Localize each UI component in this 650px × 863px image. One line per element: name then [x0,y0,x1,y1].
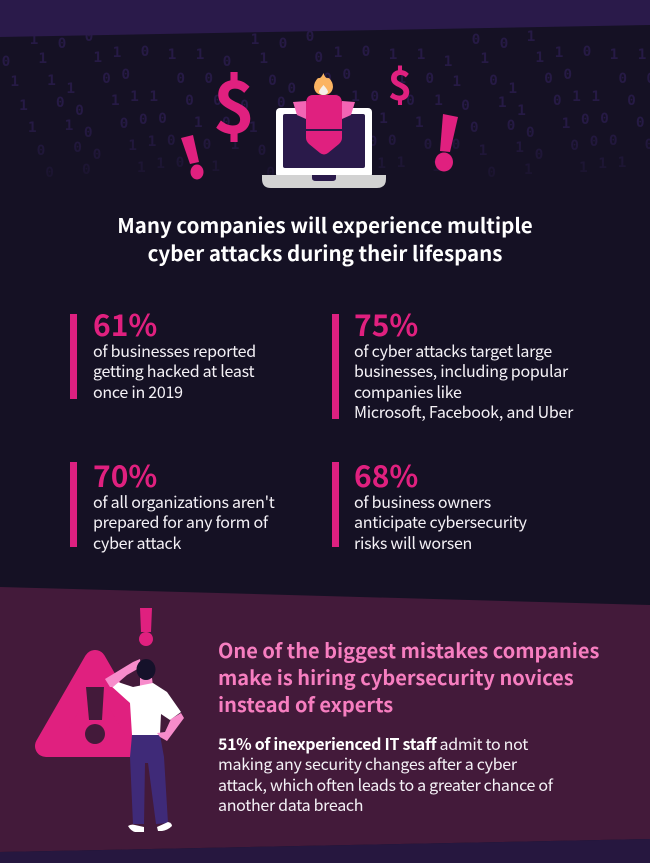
callout text: making any security changes after a cyber [218,751,517,775]
background and binary pattern: 0101011 [472,32,533,178]
icon: warning triangle [46,661,144,746]
background and binary pattern: 0001010 [306,29,367,176]
illustration: laptop with bomb [181,49,458,188]
stat: 68%: risks will worsen [354,530,472,554]
stat: 75%: businesses, including popular [354,358,568,382]
background and binary pattern: 01000 [141,44,184,171]
callout text [218,730,554,816]
stat: 70% [70,452,275,554]
icon: left exclamation mark [181,135,204,180]
stat: 61%: 61% [93,301,157,345]
background and binary pattern: 10100 [417,47,460,153]
background and binary pattern: 101001 [555,45,607,172]
stat: 68% [332,452,527,554]
heading: cyber attacks during their lifespans [148,236,502,266]
heading: Many companies will experience multiple [117,209,533,239]
icon: exclamation mark [139,608,153,646]
background and binary pattern: 101001 [334,45,386,172]
heading [117,209,533,266]
stat: 70%: 70% [93,452,157,496]
stat: 68%: anticipate cybersecurity [354,509,527,533]
stat: 61%: getting hacked at least [93,358,254,382]
callout text: 51% of inexperienced IT staff admit to not [218,730,528,754]
icon: large dollar sign: $ [213,49,255,154]
stat: 75%: Microsoft, Facebook, and Uber [354,399,573,423]
callout text: another data breach [218,792,363,816]
background and binary pattern: 1100110 [251,32,312,178]
callout heading: One of the biggest mistakes companies [218,635,599,664]
background and binary pattern: 1100101 [527,29,588,176]
background and binary pattern: 1110100 [30,32,91,178]
background and binary pattern: 110101 [389,47,441,175]
background and binary pattern: 011100 [2,54,54,181]
stat: 61%: once in 2019 [93,379,183,403]
callout heading: instead of experts [218,689,393,718]
callout text: attack, which often leads to a greater chance of [218,772,553,796]
background and binary pattern: 0101011 [85,29,146,176]
laptop [262,108,386,188]
icon: bomb [293,73,355,154]
stat: 61% [70,301,256,403]
stat: 75%: companies like [354,379,462,403]
stat: 75%: 75% [354,301,418,345]
background and binary pattern: 010100 [223,54,275,181]
icon: small dollar sign: $ [388,52,412,112]
stat: 68%: of business owners [354,489,491,513]
stat: 70%: cyber attack [93,530,181,554]
background and binary pattern: 101011 [113,45,165,172]
background and binary pattern: 00100 [279,36,322,163]
stat: 75%: of cyber attacks target large [354,338,552,362]
background and binary pattern: 110010 [444,54,496,181]
background and binary pattern: 01100 [500,36,543,163]
callout heading: make is hiring cybersecurity novices [218,662,574,691]
stat: 68%: 68% [354,452,418,496]
background and binary pattern: 00101 [362,44,406,171]
background and binary pattern: 01000 [58,36,101,163]
background and binary pattern: 01001 [583,44,627,171]
stat: 75% [332,301,574,423]
stat: 70%: prepared for any form of [93,509,268,533]
stat: 70%: of all organizations aren't [93,489,275,513]
stat: 61%: of businesses reported [93,338,256,362]
icon: right exclamation mark [435,114,458,172]
background and binary pattern: 10001 [196,47,240,153]
background and binary pattern: 100101 [168,47,220,175]
person [105,659,184,832]
callout heading [218,635,599,718]
